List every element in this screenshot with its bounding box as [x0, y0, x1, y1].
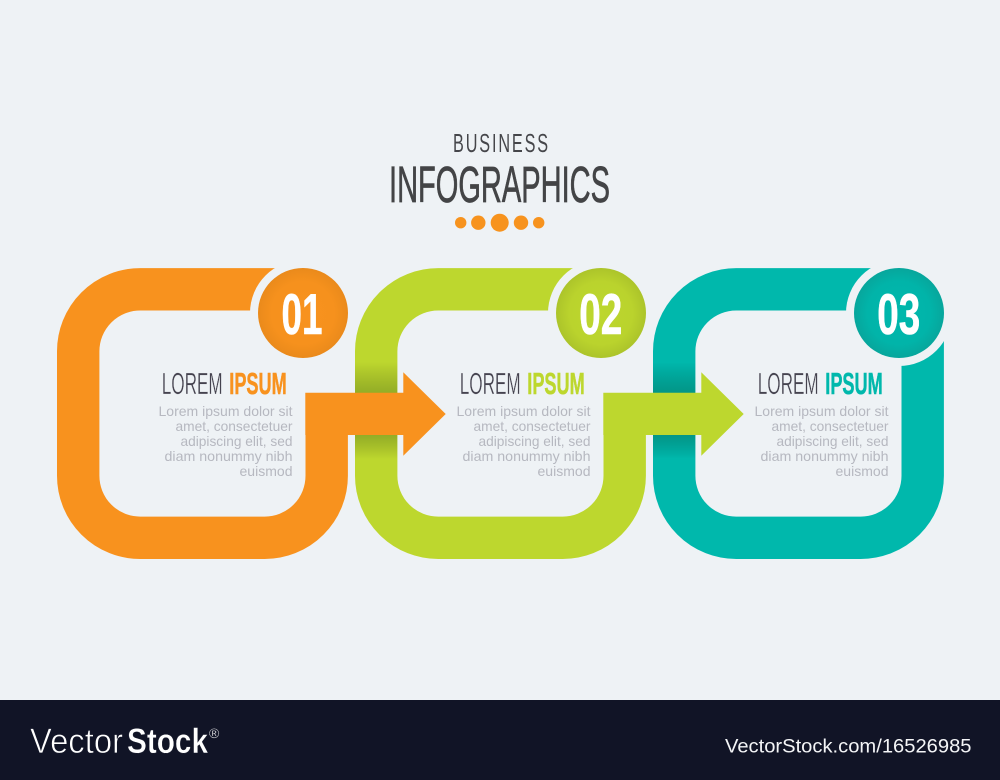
step 01 body text: diam nonummy nibh [164, 448, 292, 464]
shadow below arrow [355, 435, 397, 459]
step 03 body text [754, 403, 889, 479]
step 03 heading: IPSUM [825, 366, 883, 401]
heading: infographics: INFOGRAPHICS [389, 156, 610, 213]
step 03 body text: Lorem ipsum dolor sit [754, 403, 889, 419]
footer logo: Stock [127, 722, 208, 761]
number badge 02 [556, 268, 646, 358]
decorative dot row [455, 214, 544, 232]
number badge 01 [258, 268, 348, 358]
footer bar [0, 700, 1000, 780]
shadow above arrow [355, 362, 397, 393]
footer logo: ® [209, 725, 220, 741]
step 02 heading: LOREM [460, 366, 521, 401]
step 03 body text: amet, consectetuer [772, 418, 889, 434]
arrow to step 02 [305, 372, 446, 456]
step 02 body text: amet, consectetuer [474, 418, 591, 434]
footer logo: Vector [30, 722, 123, 761]
step 01 body text: Lorem ipsum dolor sit [158, 403, 293, 419]
number badge gap [846, 260, 952, 366]
panel: step 03 [653, 260, 952, 538]
step 01 body text: adipiscing elit, sed [180, 433, 292, 449]
title block [389, 128, 610, 232]
arrow to step 03 [603, 372, 744, 456]
step 03 body text: diam nonummy nibh [760, 448, 888, 464]
step 01 heading: IPSUM [229, 366, 287, 401]
step 02 body text [456, 403, 591, 479]
footer image id: VectorStock.com/16526985 [725, 736, 972, 758]
step 01 body text: amet, consectetuer [176, 418, 293, 434]
number badge 03 [854, 268, 944, 358]
number badge gap [250, 260, 356, 366]
step 02 body text: adipiscing elit, sed [478, 433, 590, 449]
teal ring [674, 289, 923, 538]
step 01 heading: LOREM [162, 366, 223, 401]
number badge 01: 01 [282, 283, 322, 347]
number badge 02: 02 [579, 283, 622, 347]
green ring [376, 289, 625, 538]
number badge 03: 03 [877, 283, 920, 347]
step 02 body text: Lorem ipsum dolor sit [456, 403, 591, 419]
step 01 body text: euismod [240, 463, 292, 479]
step 03 heading: LOREM [758, 366, 819, 401]
panel: step 01 [78, 260, 446, 538]
step 01 body text [158, 403, 293, 479]
step 03 body text: euismod [836, 463, 888, 479]
orange ring [78, 289, 327, 538]
step 03 body text: adipiscing elit, sed [776, 433, 888, 449]
step 02 heading: IPSUM [527, 366, 585, 401]
heading: business: BUSINESS [453, 128, 550, 158]
panel: step 02 [355, 260, 744, 538]
step 02 body text: diam nonummy nibh [462, 448, 590, 464]
footer logo [30, 722, 220, 761]
number badge gap [548, 260, 654, 366]
step 02 body text: euismod [538, 463, 590, 479]
shadow below arrow [653, 435, 695, 459]
shadow above arrow [653, 362, 695, 393]
